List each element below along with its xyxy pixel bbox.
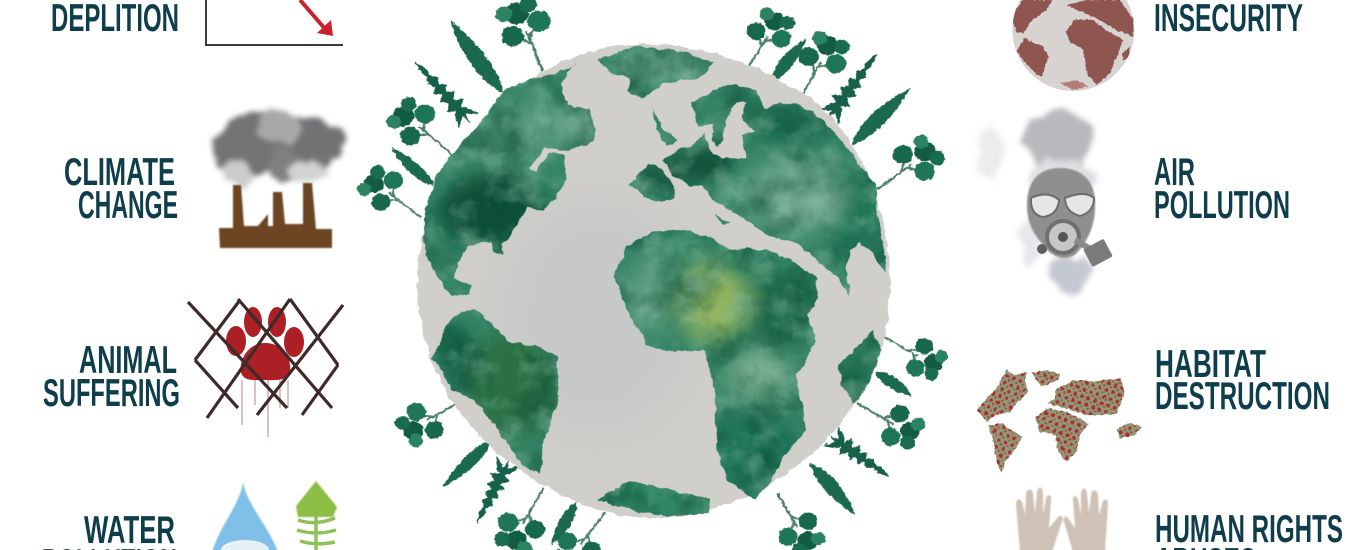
label: air pollution: POLLUTION bbox=[1154, 184, 1290, 227]
label: habitat destruction: HABITAT bbox=[1155, 343, 1266, 386]
plants around the globe bbox=[351, 0, 953, 550]
icon: water drop bbox=[212, 482, 278, 550]
label: climate change: CLIMATE bbox=[64, 151, 175, 194]
label: animal suffering: ANIMAL bbox=[79, 339, 177, 382]
label: water pollution bbox=[42, 509, 177, 550]
icon: declining chart bbox=[206, 0, 343, 45]
panel: left column issues bbox=[42, 0, 343, 550]
label: air pollution bbox=[1154, 151, 1290, 227]
icon: raised hands bbox=[1016, 488, 1108, 550]
label: animal suffering: SUFFERING bbox=[43, 372, 180, 415]
label: animal suffering bbox=[43, 339, 180, 415]
icon: factory with smoke bbox=[215, 113, 343, 248]
label: habitat destruction bbox=[1155, 343, 1330, 418]
label: climate change: CHANGE bbox=[78, 184, 178, 227]
icon: dotted world map bbox=[977, 370, 1142, 473]
icon: gas mask in smoke bbox=[976, 112, 1113, 295]
globe illustration bbox=[351, 0, 953, 550]
continents bbox=[422, 46, 886, 518]
globe ocean bbox=[417, 44, 890, 519]
label: climate change bbox=[64, 151, 178, 227]
label: air pollution: AIR bbox=[1154, 151, 1195, 194]
icon: fish skeleton bbox=[296, 481, 337, 550]
icon: bloody paw behind fence bbox=[188, 299, 343, 437]
panel: right column issues bbox=[976, 0, 1343, 550]
icon: brown food insecurity globe bbox=[1010, 0, 1134, 91]
